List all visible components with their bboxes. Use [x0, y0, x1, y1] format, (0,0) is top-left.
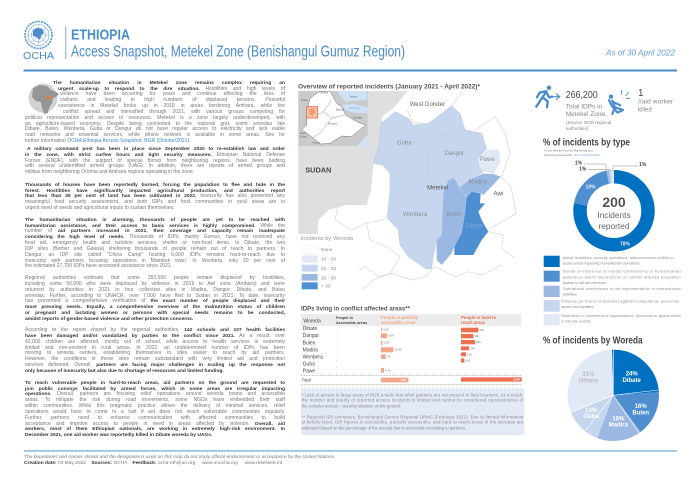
text block: houses burned: urgent need of seeds and agricultural inputs to sustain themselves. — [25, 205, 175, 211]
text block: houses burned: meaningful food security assessment, and both IDPs and host communities in rural areas are in — [25, 199, 285, 205]
text block: displacement: returned by authorities in 2021 to four collective sites in Madira, Dangur, Dibate, and Bulen — [25, 287, 285, 293]
donut chart: incidents by type: 19% — [585, 184, 596, 190]
map: place labels: SUDAN — [305, 166, 331, 174]
text block: situation overview: an agriculture-based economy. Despite being connected to the national grid, some woredas like — [25, 121, 285, 127]
text block: situation overview: The humanitarian situation in Metekel zone remains complex requiring an — [53, 81, 285, 86]
donut chart: incidents by type: 1% — [575, 161, 583, 167]
bars: hard to reach: 29K — [470, 346, 475, 350]
donut chart: incidents by type: 1% — [579, 167, 587, 173]
text block: hard-to-reach areas: workers, most of them Ethiopian nationals, are working in extremely high-risk environment. In — [25, 427, 285, 432]
table header: People in hard to — [461, 315, 496, 320]
notes box: at kebele level, IDP figures in accessible, partially accessible, and hard to reach areas in the woredas are — [302, 420, 524, 425]
map legend: Incidents by Woreda — [301, 236, 353, 242]
map inset: Ethiopia locator: Yemen — [349, 95, 358, 98]
text block: situation overview: civilians and leading to high numbers of displaced persons. Peaceful — [60, 97, 285, 103]
table rows: woreda names: Dibate — [303, 326, 317, 332]
text block: hard-to-reach areas: operations would have to come to a halt if aid does not reach vulnerable communities regularly. — [25, 409, 285, 415]
text block: humanitarian situation — [25, 218, 285, 269]
text block: situation overview: coexistence in Metekel broke up in 2019 in areas bordering Amhara, while the — [58, 103, 285, 109]
donut chart: incidents by type — [575, 161, 648, 247]
map: place labels: Bulen — [446, 212, 462, 218]
notes box: estimated based on the percentage of the woreda that is accessible according to partners. — [302, 425, 466, 430]
table column: accessible: - — [336, 343, 338, 348]
map heading: Overview of reported incidents (January 2021 - April 2022)* — [298, 84, 480, 90]
table column: accessible: - — [336, 364, 338, 369]
text block: schools and health facilities: 42,000 children are affected, mostly out of school, while access to health services is extremely — [25, 339, 285, 345]
stat: total IDPs: 266,200 — [566, 90, 598, 101]
text block: hard-to-reach areas: within communities. While this pragmatic practice allows the delivery of minimal services, relief — [25, 403, 285, 409]
table total row: 224K — [513, 378, 521, 382]
heading: incidents by type: % of incidents by type — [543, 137, 630, 149]
icon: displaced person running — [536, 85, 560, 107]
text block: displacement: most pressing needs. Equally, a comprehensive overview of the malnutrition status of children — [25, 305, 285, 310]
text block: displacement: including some 50,000 who were displaced by violence in 2019 to Awi zone (Amhara) and were — [25, 281, 285, 287]
stat: aid workers killed: #aid worker — [638, 100, 673, 106]
bars: hard to reach: - — [462, 365, 463, 369]
bars: partially accessible: 1.8K — [384, 341, 390, 345]
map legend: 26 - 30 — [321, 275, 336, 281]
map: place labels: Guba — [397, 140, 412, 146]
pie chart: incidents by woreda: Madira — [609, 423, 629, 429]
donut chart: incidents by type: 200 — [602, 194, 626, 210]
map inset: Ethiopia locator: Somalia — [353, 116, 363, 119]
map: place labels: Awi — [494, 191, 503, 197]
table total row — [301, 375, 522, 385]
legend: incident types: assistance and/or Restrictions on conflict affected population — [563, 275, 681, 279]
map inset: Ethiopia locator: Ethiopia — [328, 123, 337, 126]
stat: total IDPs: (Source: BGR regional — [566, 120, 611, 125]
text block: houses burned: Thousands of houses have been reportedly burned, forcing the population to flee and hide in the — [25, 183, 285, 188]
bars: partially accessible — [381, 327, 402, 373]
logo: OCHA — [23, 22, 54, 62]
legend: incident types: Denial of existence of needs/ entitlements to humanitarian — [563, 270, 681, 274]
text block: displacement — [25, 275, 285, 322]
stat: total IDPs: Metekel Zone, — [566, 111, 607, 118]
pie chart: incidents by woreda — [571, 350, 659, 433]
text block: humanitarian situation: food aid, emergency health and nutrition services, shelter or non-food items. In Dibate, the two — [25, 240, 285, 246]
bars: hard to reach: 19K — [467, 352, 472, 356]
text block: situation overview: urgent scale-up to respond to the dire situation. Hostilities and high levels of — [58, 86, 285, 92]
map inset: Ethiopia locator: South — [300, 132, 307, 135]
donut chart: incidents by type: Incidents — [597, 210, 631, 220]
text block: schools and health facilities: moving to woreda centers, establishing themselves in sites easier to reach by aid partners. — [25, 350, 285, 356]
text block: hard-to-reach areas: Further, partners need to enhance communication with affected communities to build — [25, 415, 285, 421]
footer: disclaimer: The boundaries and names shown and the designations used on this map do not imply official endorsement or acceptance by the United Nations. — [24, 455, 336, 460]
legend: incident types: Violence (or threat of violence) against humanitarian personnel, — [561, 300, 680, 304]
text block: humanitarian situation: insecurity with partners focusing operations in Mambuk town. In Wenbera, only 20 per cent of — [25, 258, 285, 264]
pie chart: incidents by woreda: 16% — [612, 417, 625, 423]
stat: aid workers killed — [638, 88, 673, 113]
text block: humanitarian situation: number of aid partners increased in 2021, their coverage and capacity remain inadequate — [25, 228, 285, 234]
text block: displacement: amidst reports of gender-based violence and other protection concerns. — [25, 317, 193, 322]
stat: total IDPs — [566, 90, 611, 131]
text block: military command post: A military command post has been in place since September 2020 to re-establish law and order — [27, 147, 285, 152]
icon: globe with Africa — [28, 84, 59, 114]
map inset: Ethiopia locator: Eritrea — [321, 92, 329, 95]
table column: accessible: - — [336, 326, 338, 332]
map legend: None — [321, 247, 333, 253]
map: place labels: Dibate — [465, 224, 483, 230]
table header: People in — [336, 316, 354, 320]
text block: schools and health facilities: only because of insecurity but also due to shortage of resources and limited funding. — [25, 369, 224, 374]
legend: incident types: Active Hostilities, security operations, intercommunal conflict or — [563, 256, 674, 260]
text block: situation overview: further information OCHA Ethiopia Access Snapshot, BGR (October2021). — [25, 138, 191, 144]
map: place labels: Pawe — [480, 157, 495, 163]
map: place labels — [305, 102, 503, 230]
pie chart: incidents by woreda: 31% — [582, 372, 595, 378]
map: place labels: West Gonder — [410, 102, 445, 108]
text block: hard-to-reach areas — [24, 380, 285, 438]
pie chart: incidents by woreda: 13% — [585, 408, 598, 414]
map legend: 10 - 20 — [321, 257, 336, 263]
map: place labels: Wenbera — [403, 212, 428, 218]
notes box: * Lack of access to large areas of BGR entails that relief partners are not present in field locations. As a result, — [302, 392, 523, 397]
title: snapshot name: Access Snapshot, Metekel Zone (Benishangul Gumuz Region) — [71, 44, 405, 61]
map: place labels: Madira — [468, 179, 487, 185]
table rows: woreda names: Bulen — [303, 340, 316, 346]
table total row: 42K — [401, 378, 407, 382]
header divider — [65, 26, 66, 59]
map legend: > 30 — [321, 283, 331, 289]
text block: military command post — [25, 146, 285, 175]
text block: humanitarian situation: IDP sites (Berber and Galesa) sheltering thousands of people remain out of reach to partners. In — [25, 246, 285, 252]
bars: hard to reach: 52K — [476, 340, 481, 344]
map inset: Ethiopia locator: Sudan — [301, 99, 309, 102]
framework note: In line with the Access Monitoring and — [544, 148, 593, 152]
notes box: the number and quality of reported access incidents is limited and cannot be considered representative of — [302, 398, 524, 403]
text block: hard-to-reach areas: join public convoys facilitated by armed forces, which in some areas are irregular impacting — [25, 387, 285, 392]
map: place labels: Dangur — [444, 151, 464, 157]
bars: partially accessible: 7K — [387, 355, 391, 359]
text block: houses burned: that less than 35 per cent of land has been cultivated in 2022. Insecurity has also prevented any — [25, 193, 285, 199]
legend: incident types: assets and facilities — [561, 305, 593, 309]
text block: situation overview — [25, 80, 285, 144]
text block: schools and health facilities — [25, 327, 285, 374]
table column: accessible — [336, 326, 338, 376]
text block: humanitarian situation: the estimated 27,700 IDPs have accessed assistance since 2021. — [25, 263, 172, 269]
map inset: Ethiopia locator: Kenya — [313, 142, 320, 145]
text block: situation overview: violence have been occurring for years and continue affecting the lives of — [60, 91, 285, 97]
table rows: woreda names: Dangur — [303, 333, 319, 339]
pie chart: incidents by woreda: 24% — [626, 371, 638, 377]
table column: accessible: - — [336, 371, 338, 376]
map: neighbouring boundaries — [335, 92, 516, 290]
map: Madira woreda — [454, 173, 501, 197]
bars: hard to reach: 64K — [479, 328, 484, 332]
text block: humanitarian situation: humanitarian assistance, and their access to basic services is highly compromised. While the — [25, 223, 285, 229]
text block: schools and health facilities: According to the report shared by the regional authorities, 142 schools and 107 health facilities — [25, 327, 285, 333]
text block: displacement: Regional authorities estimate that some 282,500 people remain displaced by hostilities, — [25, 275, 285, 281]
bars: partially accessible: 16.9K — [395, 348, 402, 352]
text block: military command post: Forces (ENDF), with the support of special forces from neighboring regions, have been battling — [25, 158, 285, 164]
legend: incident types: social unrest impeding humanitarian operations — [563, 262, 640, 266]
pie chart: incidents by woreda: Dibate — [623, 378, 642, 384]
table rows: woreda names: Pawe — [303, 369, 315, 375]
table header: accessible areas — [381, 320, 416, 325]
map: Sudan land — [298, 91, 407, 234]
map legend: 21 - 25 — [321, 266, 336, 272]
legend: incident types: activities — [563, 292, 577, 296]
table rows: woreda names: Wenbera — [303, 355, 323, 361]
table header: reach areas — [461, 320, 486, 325]
text block: military command post: with several unidentified armed groups (UAG). In addition, there are reports of armed groups and — [25, 163, 285, 169]
text block: situation overview: conflict spread and intensified through 2021, with various groups competing for — [63, 109, 285, 115]
stat: total IDPs: Total IDPs in — [566, 104, 603, 110]
text block: situation overview: road networks and essential services, while phone network is available in some areas. See for — [25, 132, 285, 138]
map: Dibate woreda — [454, 192, 488, 255]
bars: partially accessible: 9.9K — [388, 334, 394, 338]
map: Pawe woreda — [478, 149, 501, 174]
map inset: Ethiopia locator — [298, 91, 368, 146]
notes box — [301, 388, 524, 435]
pie chart: incidents by woreda: Guba — [583, 414, 599, 420]
map inset: Ethiopia locator: Sudan — [299, 135, 307, 138]
text block: hard-to-reach areas: acceptance and improve access to people in need in areas affected by violence. Overall, aid — [25, 421, 285, 427]
text block: humanitarian situation: The humanitarian situation is alarming, thousands of people are yet to be reached with — [25, 218, 285, 223]
table header: People in partially — [381, 315, 419, 320]
bars: hard to reach: 54K — [474, 334, 479, 338]
table header: Woreda — [303, 318, 321, 324]
bars: partially accessible: 0.8K — [383, 327, 389, 331]
date: As of 30 April 2022 — [605, 48, 676, 58]
logo: OCHA: OCHA — [23, 50, 54, 62]
legend: incident types — [544, 256, 681, 325]
text block: displacement: woredas. Further, according to UNHCR, over 7,000 have fled to Sudan in 2021. To date, insecurity — [25, 293, 285, 299]
text block: schools and health facilities: services delivered. Overall, partners are facing major challenges in scaling up the response not — [25, 362, 285, 368]
legend: incident types: or into the country — [561, 320, 591, 324]
framework note: Reporting Framework, https://bit.ly/3xxsb1b — [544, 153, 600, 157]
table header: Accessible areas — [336, 321, 367, 325]
text block: hard-to-reach areas: December 2021, one aid worker was reportedly killed in Dibate woreda by UAGs. — [25, 433, 212, 438]
text block: situation overview: political representation and access to resources. Metekel is a zone largely underdeveloped, with — [25, 115, 285, 121]
map: Bulen woreda — [437, 178, 467, 265]
table rows: woreda names: Total — [302, 378, 311, 382]
text block: military command post: in the zone, with strict curfew hours and tight security measures. Ethiopian National Defense — [25, 152, 285, 158]
map: Metekel zone — [298, 90, 516, 290]
map legend — [298, 234, 359, 299]
table rows: woreda names — [302, 326, 323, 382]
text block: houses burned — [25, 182, 285, 211]
table column: accessible: - — [336, 350, 338, 355]
stat: aid workers killed: killed — [638, 107, 652, 113]
text block: schools and health facilities: have been damaged and/or vandalized by parties to the conflict since 2021. As a result, over — [25, 333, 285, 339]
heading: incidents by woreda: % of incidents by Woreda — [543, 335, 643, 347]
text block: humanitarian situation: considering the high level of needs. Thousands of IDPs, mainly Gumuz, have not received any — [25, 234, 285, 240]
bars: hard to reach: 11K — [465, 358, 470, 362]
map: woreda internal boundaries — [392, 130, 465, 190]
text block: situation overview: Dibate, Bulen, Wenbera, Guba or Dangur do not have regular access to electricity and lack viable — [25, 126, 285, 132]
text block: military command post: militias from neighboring Oromia and Amhara regions operating in the zone. — [25, 169, 194, 175]
title: country: ETHIOPIA — [71, 26, 130, 43]
bars: partially accessible: - — [381, 362, 382, 366]
stat: total IDPs: authorities) — [566, 126, 589, 131]
pie chart: incidents by woreda: 16% — [635, 404, 647, 410]
table heading: IDPs living in conflict affected areas** — [301, 306, 410, 312]
text block: displacement: has prevented a comprehensive verification of the exact number of people displaced and their — [25, 298, 285, 304]
pie chart: incidents by woreda: Others — [579, 379, 599, 385]
legend: incident types: access to aid and services — [563, 281, 606, 285]
IDP table — [301, 314, 524, 435]
text block: displacement: or pregnant and lactating women or persons with special needs remains to be conducted, — [25, 311, 285, 316]
table header — [301, 314, 521, 326]
text block: schools and health facilities: However, the conditions in these sites remain substandard with very limited aid and protection — [25, 356, 285, 362]
pie chart: incidents by woreda: Bulen — [632, 411, 649, 417]
legend: incident types: Operational interference in the implementation of humanitarian — [563, 287, 681, 291]
table column: accessible: - — [336, 334, 338, 339]
icon: aid worker falling — [609, 90, 630, 114]
table rows: woreda names: Guba — [303, 362, 315, 368]
bars: hard to reach — [461, 328, 484, 369]
map: Guba, Dangur and Wenbera woredas — [373, 106, 487, 269]
table column: accessible: - — [336, 357, 338, 362]
notes box: ** Regional IDP estimates, Benishangul Gumuz Regional DRMC (February 2022). Due to limited information — [302, 414, 524, 419]
footer: credits: Creation date: 03 May 2022 Sources: OCHA Feedback: ocha-eth@un.org www.unocha.org www.reliefweb.int — [24, 461, 282, 466]
text block: hard-to-reach areas: operations. Overall, partners are focusing relief operations around woreda towns and accessible — [25, 391, 285, 397]
bars: partially accessible: 4.7K — [385, 368, 391, 372]
donut chart: incidents by type: 1% — [639, 162, 647, 168]
map: place labels: Metekel — [427, 185, 448, 191]
text block: schools and health facilities: limited and non-existent in rural areas. In 2022, an undetermined number of IDPs has been — [25, 345, 285, 351]
text block: hard-to-reach areas: areas. To mitigate the risk during road movements, some NGOs have embedded their staff — [25, 397, 285, 403]
text block: humanitarian situation: Dangur, an IDP site called "China Camp" hosting 6,000 IDPs remains hard-to-reach due to — [25, 252, 285, 258]
map inset: Ethiopia locator: Djibouti — [336, 109, 345, 112]
legend: incident types: Restriction of movement of organizations, personnel or goods within — [561, 314, 681, 318]
donut chart: incidents by type: 78% — [620, 241, 631, 247]
map inset: Ethiopia locator: Red Sea — [349, 107, 360, 110]
text block: hard-to-reach areas: To reach vulnerable people in hard-to-reach areas, aid partners on the ground are requested to — [25, 381, 285, 386]
stat: aid workers killed: 1 — [638, 88, 643, 99]
notes box: the complex access – security situation on the ground. — [302, 403, 401, 408]
text block: houses burned: forest. Hostilities have significantly impacted agricultural production, and authorities report — [25, 189, 285, 194]
donut chart: incidents by type: reported — [599, 221, 630, 231]
table rows: woreda names: Madira — [303, 347, 318, 353]
framework note — [544, 148, 600, 157]
